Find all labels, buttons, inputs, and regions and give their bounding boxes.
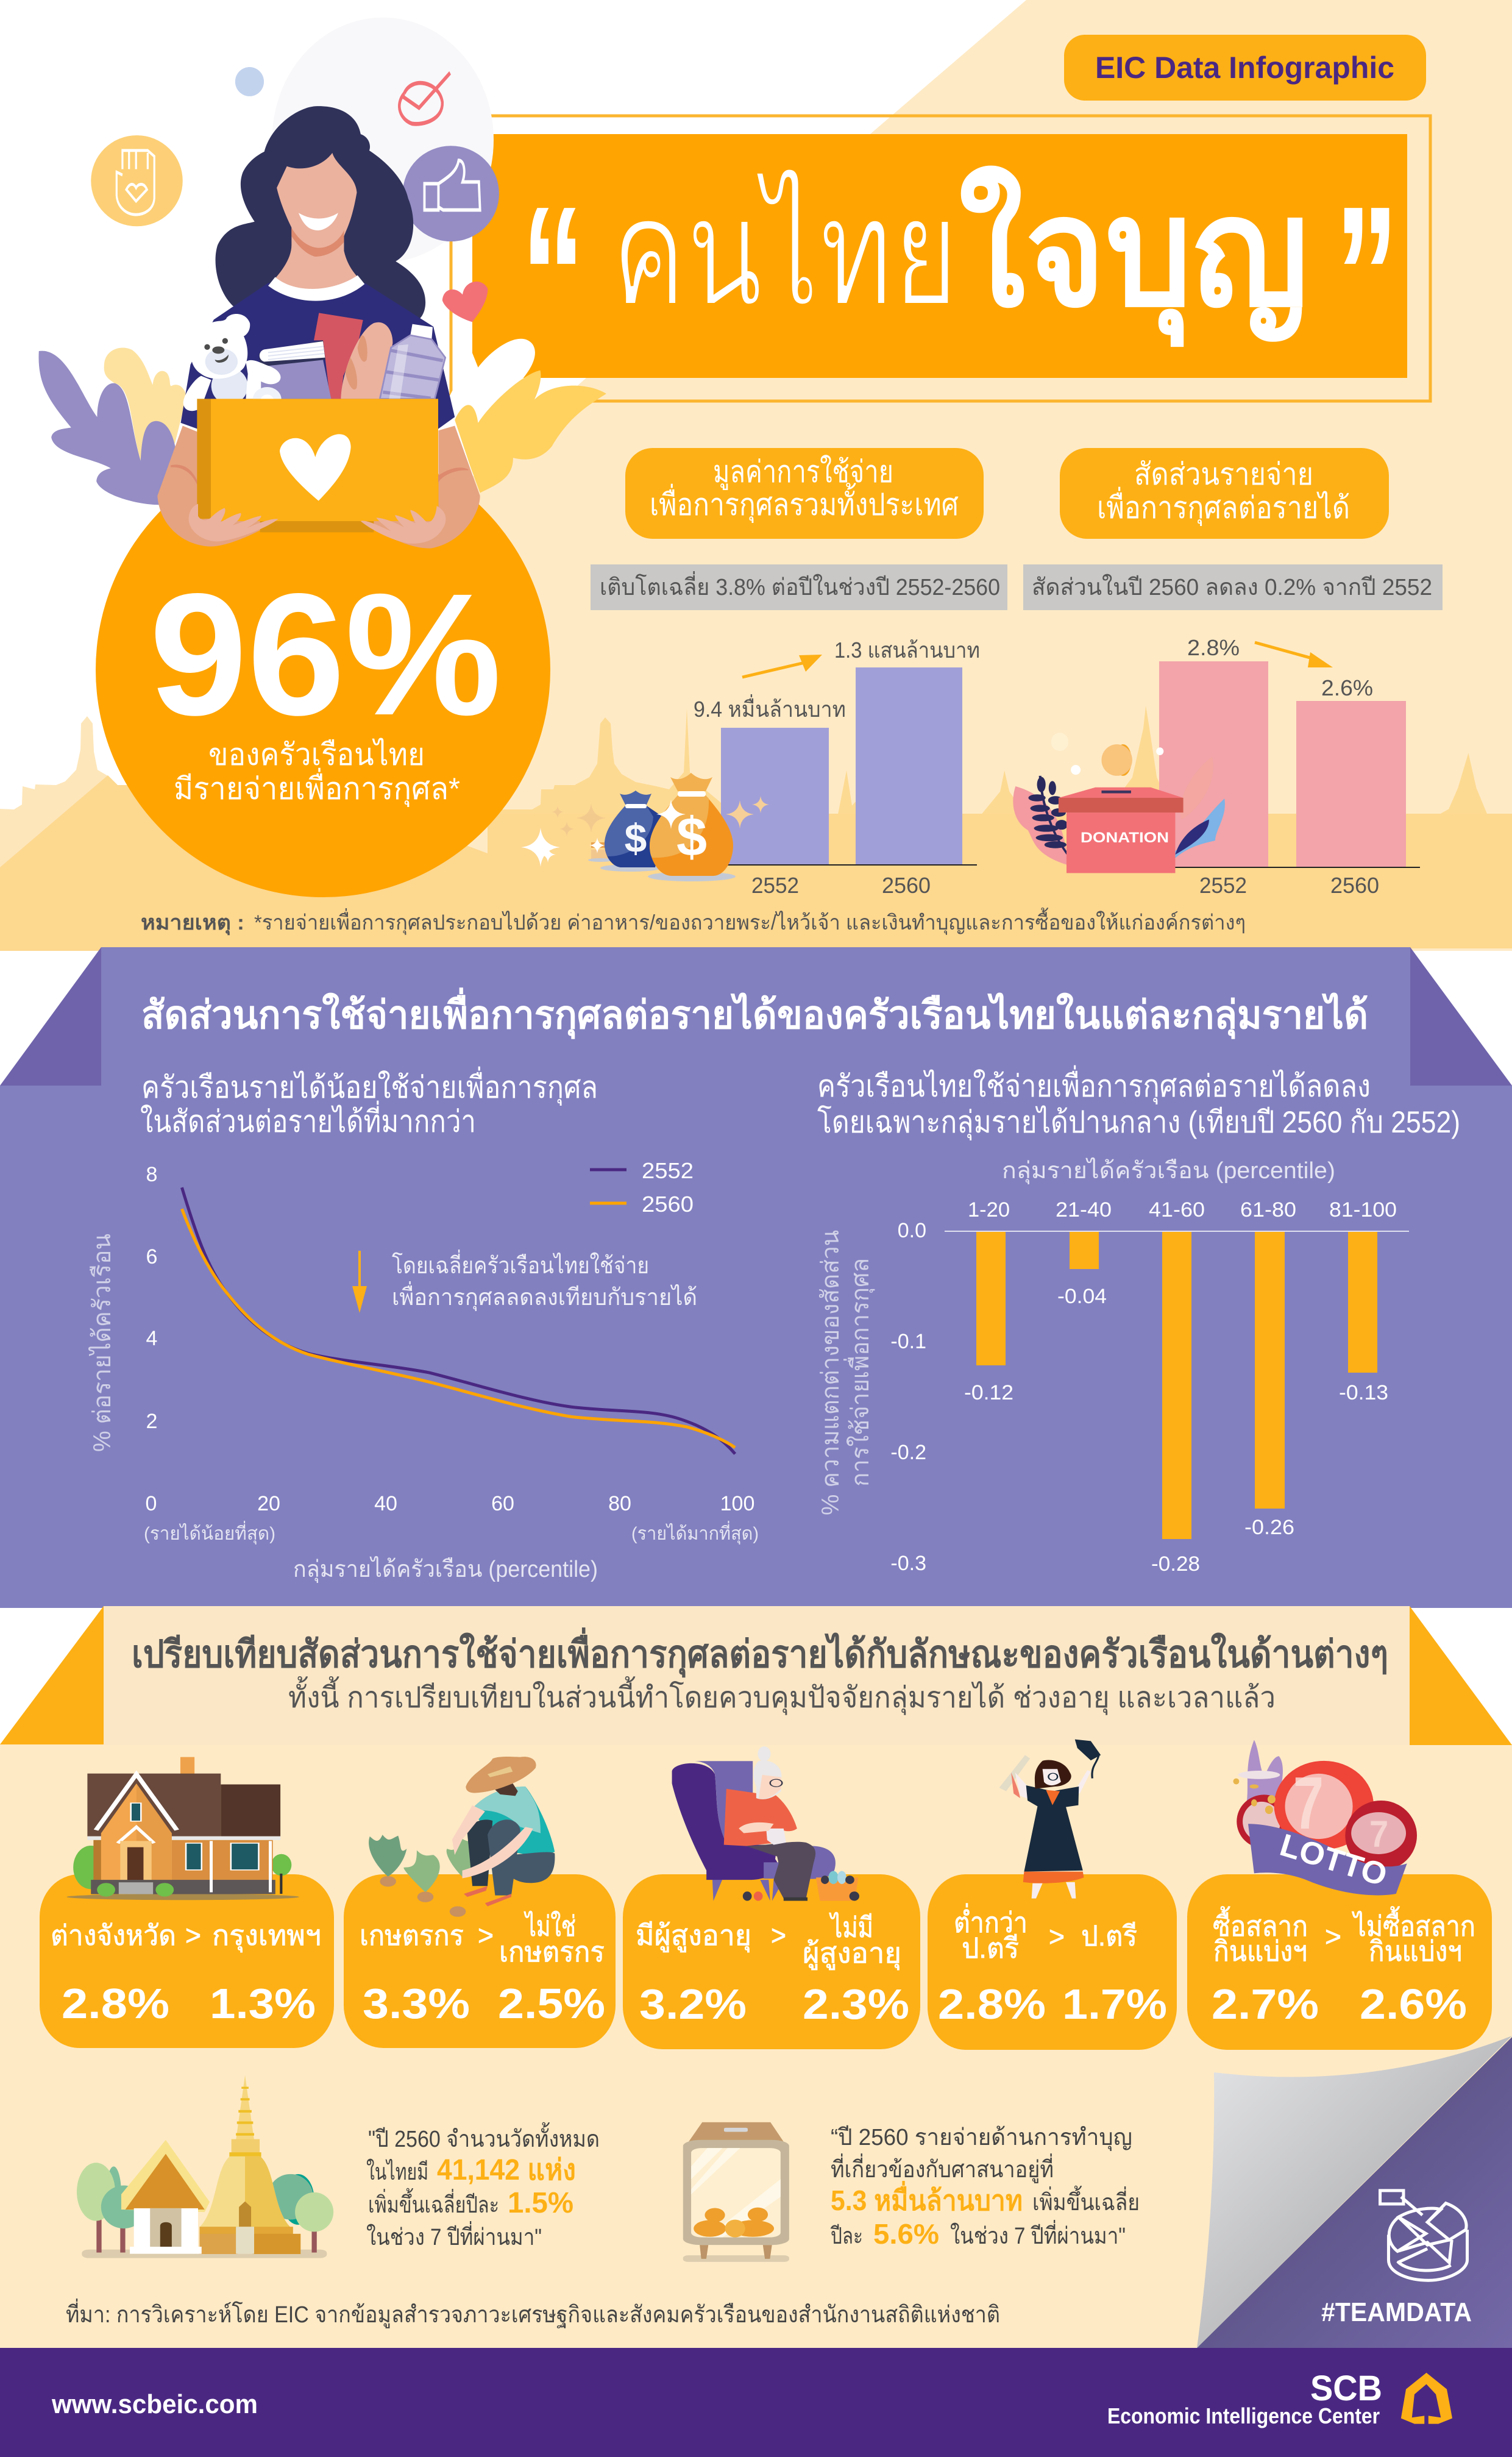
subheading left: ครัวเรือนรายได้น้อยใช้จ่ายเพื่อการกุศล <box>141 1067 598 1106</box>
card: elderly: ผู้สูงอายุ <box>803 1937 901 1971</box>
card: province vs Bangkok: กรุงเทพฯ <box>212 1919 321 1953</box>
bar chart: change by income group: 41-60 <box>1149 1198 1205 1221</box>
illustration: woman holding donation box <box>38 18 606 549</box>
card: province vs Bangkok: 1.3% <box>210 1980 316 2027</box>
text: temples: 1.5% <box>508 2187 573 2219</box>
bar chart: change by income group: 21-40 <box>1056 1198 1112 1221</box>
icon: check mark <box>399 73 450 124</box>
icon: grandmother in chair <box>672 1746 859 1901</box>
arrow up <box>742 655 822 677</box>
card: education: ต่ำกว่า <box>954 1903 1028 1938</box>
line chart: (รายได้มากที่สุด) <box>631 1521 759 1545</box>
footnote: *รายจ่ายเพื่อการกุศลประกอบไปด้วย ค่าอาหาร/ของถวายพระ/ไหว้เจ้า และเงินทำบุญและการซื้อของให้แก่องค์กรต่างๆ <box>254 908 1246 935</box>
page curl with team data: #TEAMDATA <box>1321 2297 1472 2327</box>
bar chart: total spending <box>694 638 980 898</box>
title block: ” <box>1335 165 1399 387</box>
icon: thumbs up <box>403 146 499 241</box>
card: province vs Bangkok: > <box>185 1919 201 1951</box>
card: elderly <box>623 1874 920 2049</box>
card: lottery <box>1187 1874 1492 2050</box>
annotation: เพื่อการกุศลลดลงเทียบกับรายได้ <box>392 1281 697 1311</box>
subheading left: ในสัดส่วนต่อรายได้ที่มากกว่า <box>140 1101 476 1139</box>
card: elderly: > <box>771 1919 786 1951</box>
card: lottery: กินแบ่งฯ <box>1369 1935 1462 1967</box>
bar chart: change by income group: 61-80 <box>1240 1198 1296 1221</box>
bar chart: share of income: 2552 <box>1199 873 1247 898</box>
bar chart: change by income group: 1-20 <box>968 1198 1010 1221</box>
footer: www.scbeic.com <box>51 2389 258 2419</box>
card: farmers: 3.3% <box>363 1980 470 2027</box>
bar chart: change by income group: -0.26 <box>1244 1516 1294 1539</box>
top pill: EIC Data Infographic <box>1064 35 1426 101</box>
subheading left <box>140 1067 598 1139</box>
text: temples <box>366 2122 600 2250</box>
pill: share of income: เพื่อการกุศลต่อรายได้ <box>1097 487 1350 526</box>
title block: คนไทย <box>611 167 959 337</box>
96 percent circle: 96% <box>149 558 502 752</box>
card: farmers: ไม่ใช่ <box>524 1910 576 1942</box>
icon: lotto balls: LOTTO <box>1276 1827 1391 1893</box>
card: elderly: 2.3% <box>803 1980 909 2028</box>
icon: heart <box>442 282 488 322</box>
bar chart: change by income group: -0.28 <box>1151 1552 1200 1576</box>
heading: comparison: เปรียบเทียบสัดส่วนการใช้จ่ายเพื่อการกุศลต่อรายได้กับลักษณะของครัวเรือนในด้านต่างๆ <box>132 1627 1388 1677</box>
bar chart: change by income group: 81-100 <box>1329 1198 1397 1221</box>
icon: donation jar <box>683 2122 789 2262</box>
legend <box>590 1158 694 1217</box>
numeral sevens: 7 <box>1293 1762 1324 1844</box>
card: lottery: 2.7% <box>1212 1980 1319 2028</box>
title block: “ <box>521 165 585 387</box>
line chart: 20 <box>257 1492 280 1515</box>
dollar signs: $ <box>676 807 707 868</box>
icon: temple <box>77 2075 333 2258</box>
grey note: share <box>1023 564 1443 610</box>
card: farmers: เกษตรกร <box>499 1936 605 1968</box>
text: merit spending: ที่เกี่ยวข้องกับศาสนาอยู่ที่ <box>831 2153 1054 2183</box>
icon: hand with heart <box>91 135 183 226</box>
line chart <box>88 1158 759 1583</box>
numeral sevens <box>1293 1762 1388 1855</box>
card: province vs Bangkok <box>40 1874 334 2048</box>
subheading right <box>817 1065 1460 1140</box>
bar chart: change by income group: % ความแตกต่างของสัดส่วน <box>817 1230 844 1515</box>
text: merit spending: “ปี 2560 รายจ่ายด้านการทำบุญ <box>831 2125 1132 2151</box>
card: lottery: 2.6% <box>1360 1980 1467 2028</box>
source: ที่มา: การวิเคราะห์โดย EIC จากข้อมูลสำรวจภาวะเศรษฐกิจและสังคมครัวเรือนของสำนักงานสถิติแห่งชาติ <box>66 2299 1000 2328</box>
arms <box>157 426 278 547</box>
sparkles and coin stack <box>521 803 612 867</box>
grey note: growth <box>591 564 1007 610</box>
card: elderly: มีผู้สูงอายุ <box>636 1919 751 1953</box>
card: lottery: ไม่ซื้อสลาก <box>1351 1906 1475 1942</box>
panel: purple income section <box>0 947 1512 1608</box>
bar chart: change by income group: -0.2 <box>890 1441 926 1464</box>
bar chart: change by income group: -0.13 <box>1339 1381 1388 1404</box>
footer: Economic Intelligence Center <box>1107 2403 1380 2428</box>
card: education <box>928 1874 1177 2050</box>
line chart: 6 <box>146 1245 157 1268</box>
subheading right: ครัวเรือนไทยใช้จ่ายเพื่อการกุศลต่อรายได้ลดลง <box>817 1065 1371 1104</box>
hair and face <box>216 106 425 321</box>
card: farmers: 2.5% <box>498 1980 605 2027</box>
grey note: growth: เติบโตเฉลี่ย 3.8% ต่อปีในช่วงปี 2552-2560 <box>600 571 1000 600</box>
icon: lotto balls <box>1233 1740 1417 1895</box>
card: education: ป.ตรี <box>962 1932 1019 1964</box>
logo <box>1401 2373 1452 2424</box>
icon: money bags <box>600 773 769 881</box>
card: education: > <box>1049 1921 1065 1952</box>
bar chart: change by income group: 0.0 <box>898 1219 926 1242</box>
line chart: % ต่อรายได้ครัวเรือน <box>88 1234 116 1452</box>
arrow: decline <box>352 1251 367 1313</box>
card: elderly: ไม่มี <box>829 1911 873 1943</box>
text: merit spending: 5.6% <box>873 2218 939 2250</box>
footnote: หมายเหตุ : <box>141 911 244 936</box>
text: temples: "ปี 2560 จำนวนวัดทั้งหมด <box>368 2122 600 2152</box>
icon: house <box>66 1757 299 1900</box>
page curl with team data <box>1197 2036 1512 2348</box>
bar chart: change by income group: -0.1 <box>890 1330 926 1353</box>
bar chart: total spending: 2552 <box>751 873 799 898</box>
icon: donation box <box>1013 733 1225 873</box>
box contents, box and hands <box>171 313 468 544</box>
bar chart: total spending: 2560 <box>882 873 931 898</box>
bar chart: share of income <box>1159 635 1420 898</box>
top pill: EIC Data Infographic: EIC Data Infographic <box>1095 51 1394 85</box>
annotation: โดยเฉลี่ยครัวเรือนไทยใช้จ่าย <box>392 1250 649 1279</box>
pill: share of income: สัดส่วนรายจ่าย <box>1134 457 1313 491</box>
icon: farmer <box>369 1757 555 1917</box>
icon: pie chart <box>1380 2191 1468 2280</box>
card: education: 1.7% <box>1062 1980 1167 2028</box>
96 percent circle: ของครัวเรือนไทย <box>208 738 425 772</box>
bar chart: share of income: 2.6% <box>1321 675 1373 700</box>
text: temples: เพิ่มขึ้นเฉลี่ยปีละ <box>368 2188 499 2218</box>
text: merit spending: 5.3 หมื่นล้านบาท <box>831 2181 1023 2216</box>
panel: lower cream section <box>0 1606 1512 2348</box>
card: farmers <box>344 1874 616 2048</box>
top background: cream diagonal and temple skyline <box>0 0 1512 951</box>
leaves <box>104 347 186 461</box>
card: farmers: > <box>478 1919 494 1951</box>
line chart: 2 <box>146 1410 157 1433</box>
pill: share of income <box>1060 448 1389 539</box>
bar chart: change by income group: กลุ่มรายได้ครัวเรือน (percentile) <box>1002 1157 1335 1184</box>
text: merit spending <box>831 2125 1140 2250</box>
heading: comparison: ทั้งนี้ การเปรียบเทียบในส่วนนี้ทำโดยควบคุมปัจจัยกลุ่มรายได้ ช่วงอายุ และเวลาแล้ว <box>288 1676 1276 1715</box>
pill: total spending: มูลค่าการใช้จ่าย <box>713 455 893 490</box>
footer: SCB <box>1310 2369 1382 2408</box>
bar chart: share of income: 2560 <box>1330 873 1379 898</box>
line chart: 4 <box>146 1327 157 1350</box>
heading: income share: สัดส่วนการใช้จ่ายเพื่อการกุศลต่อรายได้ของครัวเรือนไทยในแต่ละกลุ่มรายได้ <box>141 987 1368 1039</box>
numeral sevens: 7 <box>1369 1814 1388 1855</box>
bar chart: change by income group: -0.3 <box>890 1552 926 1575</box>
line chart: กลุ่มรายได้ครัวเรือน (percentile) <box>293 1556 598 1583</box>
card: lottery: กินแบ่งฯ <box>1213 1935 1307 1967</box>
arrow down <box>1255 642 1333 667</box>
bar chart: change by income group: -0.04 <box>1057 1285 1107 1308</box>
dollar signs <box>625 807 707 868</box>
line chart: 100 <box>720 1492 754 1515</box>
text: merit spending: ในช่วง 7 ปีที่ผ่านมา" <box>950 2220 1126 2249</box>
legend: 2552 <box>642 1158 694 1183</box>
card: education: ป.ตรี <box>1081 1920 1137 1952</box>
text: merit spending: ปีละ <box>831 2224 863 2249</box>
bar chart: change by income group <box>817 1157 1409 1576</box>
icon: graduate <box>999 1740 1101 1899</box>
card: elderly: 3.2% <box>639 1980 747 2028</box>
line chart: 80 <box>608 1492 631 1515</box>
text: temples: 41,142 แห่ง <box>437 2154 576 2186</box>
text: temples: ในไทยมี <box>366 2159 428 2185</box>
line chart: 0 <box>146 1492 157 1515</box>
96 percent circle: มีรายจ่ายเพื่อการกุศล* <box>174 768 460 807</box>
card: lottery: > <box>1325 1921 1341 1952</box>
card: province vs Bangkok: 2.8% <box>62 1980 169 2027</box>
card: province vs Bangkok: ต่างจังหวัด <box>51 1919 176 1951</box>
pill: total spending: เพื่อการกุศลรวมทั้งประเทศ <box>650 483 959 523</box>
line chart: 8 <box>146 1163 157 1186</box>
title block <box>451 116 1430 401</box>
bar chart: change by income group: -0.12 <box>964 1381 1013 1404</box>
bar chart: total spending: 9.4 หมื่นล้านบาท <box>694 694 846 722</box>
bar chart: share of income: 2.8% <box>1187 635 1240 660</box>
grey note: share: สัดส่วนในปี 2560 ลดลง 0.2% จากปี 2552 <box>1032 574 1432 600</box>
line chart: 60 <box>491 1492 514 1515</box>
bar chart: total spending: 1.3 แสนล้านบาท <box>834 638 980 663</box>
text: merit spending: เพิ่มขึ้นเฉลี่ย <box>1032 2185 1140 2216</box>
bar chart: change by income group: การใช้จ่ายเพื่อการกุศล <box>843 1258 875 1487</box>
card: lottery: ซื้อสลาก <box>1213 1906 1308 1942</box>
heading: comparison <box>132 1627 1388 1715</box>
icon: donation box: DONATION <box>1081 830 1169 846</box>
title block: ใจบุญ <box>959 165 1308 347</box>
legend: 2560 <box>642 1192 694 1217</box>
dollar signs: $ <box>625 816 647 861</box>
annotation <box>392 1250 697 1311</box>
footer <box>0 2348 1512 2457</box>
line chart: 40 <box>374 1492 397 1515</box>
card: farmers: เกษตรกร <box>360 1919 464 1951</box>
card: education: 2.8% <box>938 1980 1046 2028</box>
pill: total spending <box>625 448 984 539</box>
96 percent circle <box>96 443 550 897</box>
text: temples: ในช่วง 7 ปีที่ผ่านมา" <box>366 2221 542 2250</box>
line chart: (รายได้น้อยที่สุด) <box>144 1521 275 1545</box>
